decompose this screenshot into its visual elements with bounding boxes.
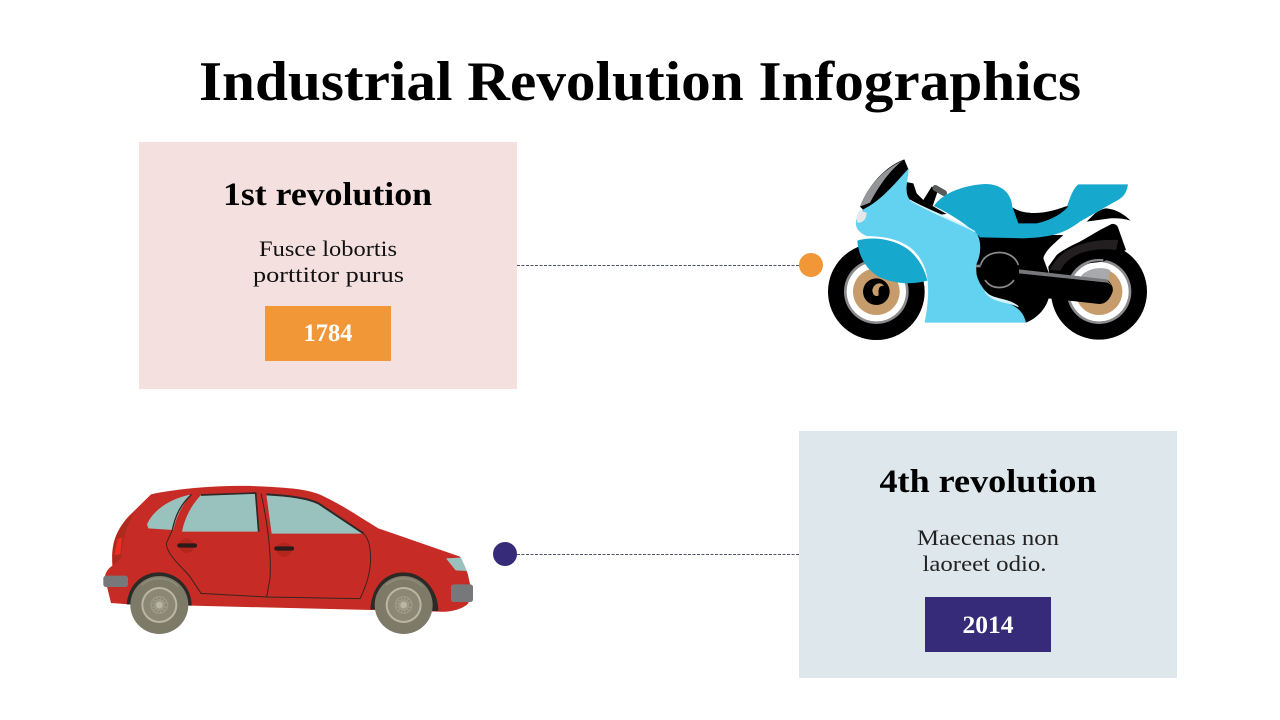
connector: 1st revolution to motorcycle [517,253,823,277]
year badge: 2014: 2014 [962,612,1014,639]
fairing highlight [910,200,1018,307]
heading: 4th revolution: 4th revolution [880,464,1096,500]
tail shadow [1087,208,1131,222]
panel: 4th revolution [799,431,1177,678]
text block: 4th revolution description [917,525,1059,576]
panel: 1st revolution [139,142,517,389]
door handles [177,538,294,557]
tail light [114,538,122,555]
heading: 1st revolution: 1st revolution [223,177,432,213]
rear wheel opening [1073,260,1131,292]
seat black [1013,206,1068,223]
front wheel [375,576,433,634]
text block: 4th revolution description: laoreet odio. [922,551,1046,576]
tail shading [113,512,134,566]
text block: 1st revolution description: Fusce lobortis [259,236,397,261]
icon: car [103,486,473,634]
wheel arches [127,572,192,606]
title: Industrial Revolution Infographics [199,51,1081,113]
icon: motorcycle [828,159,1147,340]
rear door window [182,493,258,532]
year badge: 1784 [265,306,391,361]
rear fender highlight [1050,240,1118,271]
handlebar [904,182,947,215]
car body [105,486,471,612]
connector: car to 4th revolution [493,542,800,566]
engine cover rings [975,252,1018,287]
windscreen [860,159,909,212]
fairing [856,168,1026,323]
text block: 1st revolution description [253,236,404,287]
text block: 4th revolution description: Maecenas non [917,525,1059,550]
front wheel [828,243,925,340]
headlight [446,558,467,571]
bumpers [103,576,128,587]
text block: 1st revolution description: porttitor purus [253,262,404,287]
headlight [857,211,867,223]
front fender [857,239,927,283]
rear wheel [1051,244,1147,340]
year badge: 2014 [925,597,1051,652]
fuel tank and seat [934,184,1128,238]
rear quarter window [147,494,192,530]
door seams [166,493,371,599]
engine and frame [975,235,1063,323]
year badge: 1784: 1784 [304,320,353,347]
rear wheel [130,576,188,634]
swingarm [1019,270,1113,304]
front door window [266,494,362,534]
rear fender [1048,224,1126,290]
